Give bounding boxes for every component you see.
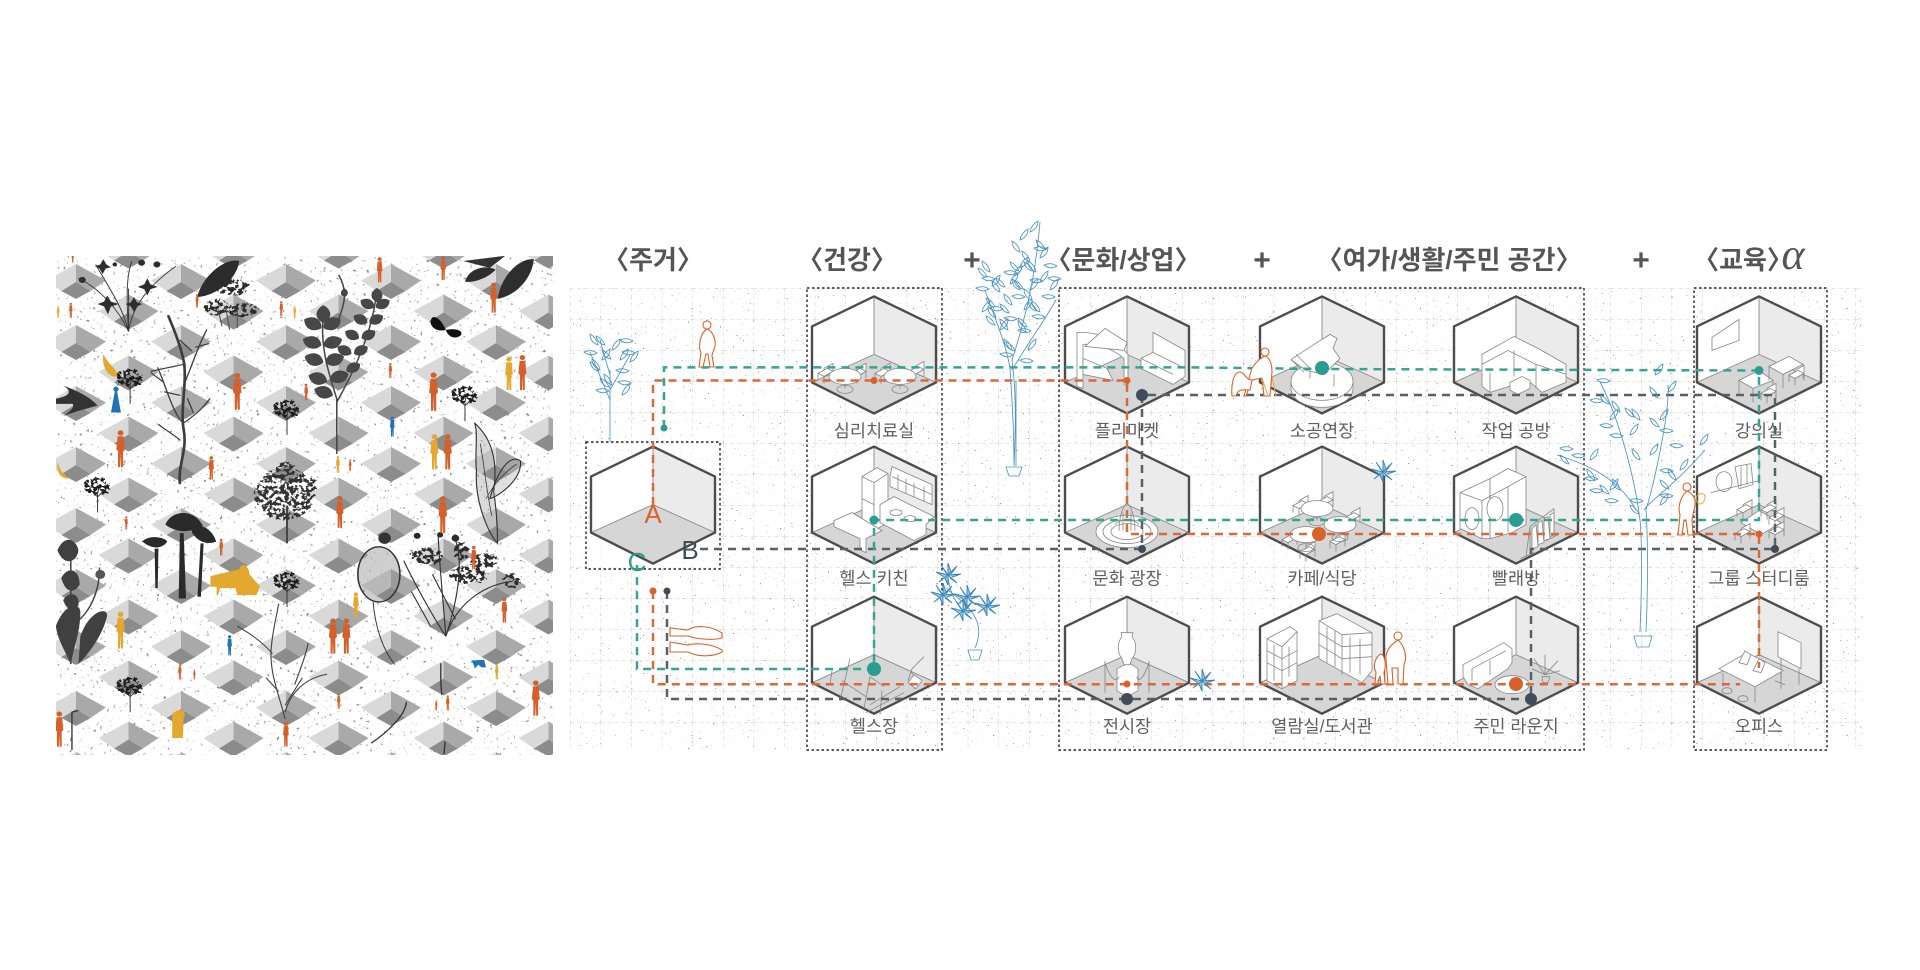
- person: standing: [699, 321, 715, 367]
- big dark leaves: [498, 259, 534, 299]
- butterfly: [431, 317, 461, 338]
- label: 헬스장: 헬스장: [850, 716, 898, 736]
- star plant 2: [1190, 669, 1215, 691]
- plus sign 3: +: [1632, 244, 1650, 277]
- star plant 1: [1371, 460, 1396, 482]
- label: 오피스: 오피스: [1735, 716, 1783, 736]
- dark leaf clusters C: [197, 261, 258, 330]
- person: with dog: [1678, 483, 1705, 535]
- panel: isometric pattern map: [55, 253, 553, 755]
- route C: teal: [637, 367, 1759, 669]
- left leafy plant: [56, 540, 107, 665]
- label: 강의실: 강의실: [1735, 421, 1783, 441]
- route nodes: [650, 361, 1779, 705]
- fern tree D: [300, 275, 392, 454]
- round tree: [286, 506, 288, 544]
- room: 문화 광장: [1065, 447, 1189, 564]
- label: 헬스 키친: 헬스 키친: [839, 568, 909, 588]
- letter B: B: [681, 535, 699, 565]
- letter A: A: [644, 499, 662, 529]
- room: 심리치료실: [812, 296, 936, 413]
- label: 주민 라운지: 주민 라운지: [1473, 716, 1559, 736]
- people: lying pair: [670, 627, 722, 656]
- room: 주민 라운지: [1454, 597, 1578, 714]
- route B: slate: [667, 395, 1775, 699]
- label: 카페/식당: 카페/식당: [1287, 568, 1357, 588]
- people: parent and child: [1374, 632, 1405, 684]
- panel: program diagram background: [570, 288, 1863, 750]
- room: 소공연장: [1260, 296, 1384, 413]
- room: 오피스: [1697, 597, 1821, 714]
- group box: 문화 여가: [1059, 288, 1584, 750]
- group box: 건강: [807, 288, 942, 750]
- person: seated with chair: [1232, 348, 1276, 396]
- room: 카페/식당: [1260, 447, 1384, 564]
- umbrella plants: [115, 368, 144, 404]
- large tree center-right: [1557, 364, 1708, 647]
- mushrooms: [142, 513, 216, 599]
- dark sticks: [72, 663, 445, 754]
- label: 그룹 스터디룸: 그룹 스터디룸: [1708, 568, 1810, 588]
- label: 열람실/도서관: 열람실/도서관: [1271, 716, 1373, 736]
- balloon: [358, 533, 400, 665]
- heading: 교육: 〈교육〉: [1693, 245, 1793, 275]
- label: 문화 광장: 문화 광장: [1092, 568, 1162, 588]
- yellow people: [57, 306, 513, 738]
- orange people: [55, 253, 540, 747]
- room: 빨래방: [1454, 447, 1578, 564]
- swallow bird: [56, 386, 98, 416]
- heading: 건강: 〈건강〉: [797, 245, 897, 275]
- room: 전시장: [1065, 597, 1189, 714]
- heading: 주거: 〈주거〉: [603, 245, 703, 275]
- label: 심리치료실: 심리치료실: [834, 421, 914, 441]
- label: 작업 공방: 작업 공방: [1481, 421, 1551, 441]
- label: 플리마켓: 플리마켓: [1095, 421, 1159, 441]
- plus sign 1: +: [963, 244, 981, 277]
- label: 빨래방: 빨래방: [1492, 568, 1540, 588]
- big sketchy leaf: [475, 423, 521, 543]
- small tree: [584, 334, 638, 442]
- heading: 문화/상업: 〈문화/상업〉: [1046, 245, 1200, 275]
- large potted tree: [976, 221, 1061, 476]
- label: 소공연장: 소공연장: [1290, 421, 1354, 441]
- room: 강의실: [1697, 296, 1821, 413]
- room: 헬스장: [812, 597, 936, 715]
- room: 헬스 키친: [812, 447, 936, 564]
- letter C: C: [628, 547, 646, 577]
- bare tree: [237, 604, 327, 719]
- room: 플리마켓: [1065, 296, 1189, 413]
- yellow piano: [210, 565, 260, 595]
- flower branches: [404, 532, 519, 636]
- residential unit: [586, 442, 720, 569]
- room: 열람실/도서관: [1260, 597, 1384, 714]
- plant A: [78, 259, 176, 332]
- room: 작업 공방: [1454, 296, 1578, 413]
- heading: 여가/생활/주민 공간: 〈여가/생활/주민 공간〉: [1316, 245, 1582, 275]
- flower pot plant: [931, 563, 1000, 660]
- plus sign 2: +: [1253, 244, 1271, 277]
- room: 그룹 스터디룸: [1697, 447, 1821, 564]
- group box: 교육: [1694, 288, 1827, 750]
- figures and plants scattered on the pattern: [55, 253, 540, 754]
- label: 전시장: 전시장: [1103, 716, 1151, 736]
- route A: orange: [653, 380, 1759, 684]
- blue people: [111, 385, 486, 668]
- alpha symbol: α: [1781, 230, 1805, 279]
- gnarled tree B: [151, 316, 210, 483]
